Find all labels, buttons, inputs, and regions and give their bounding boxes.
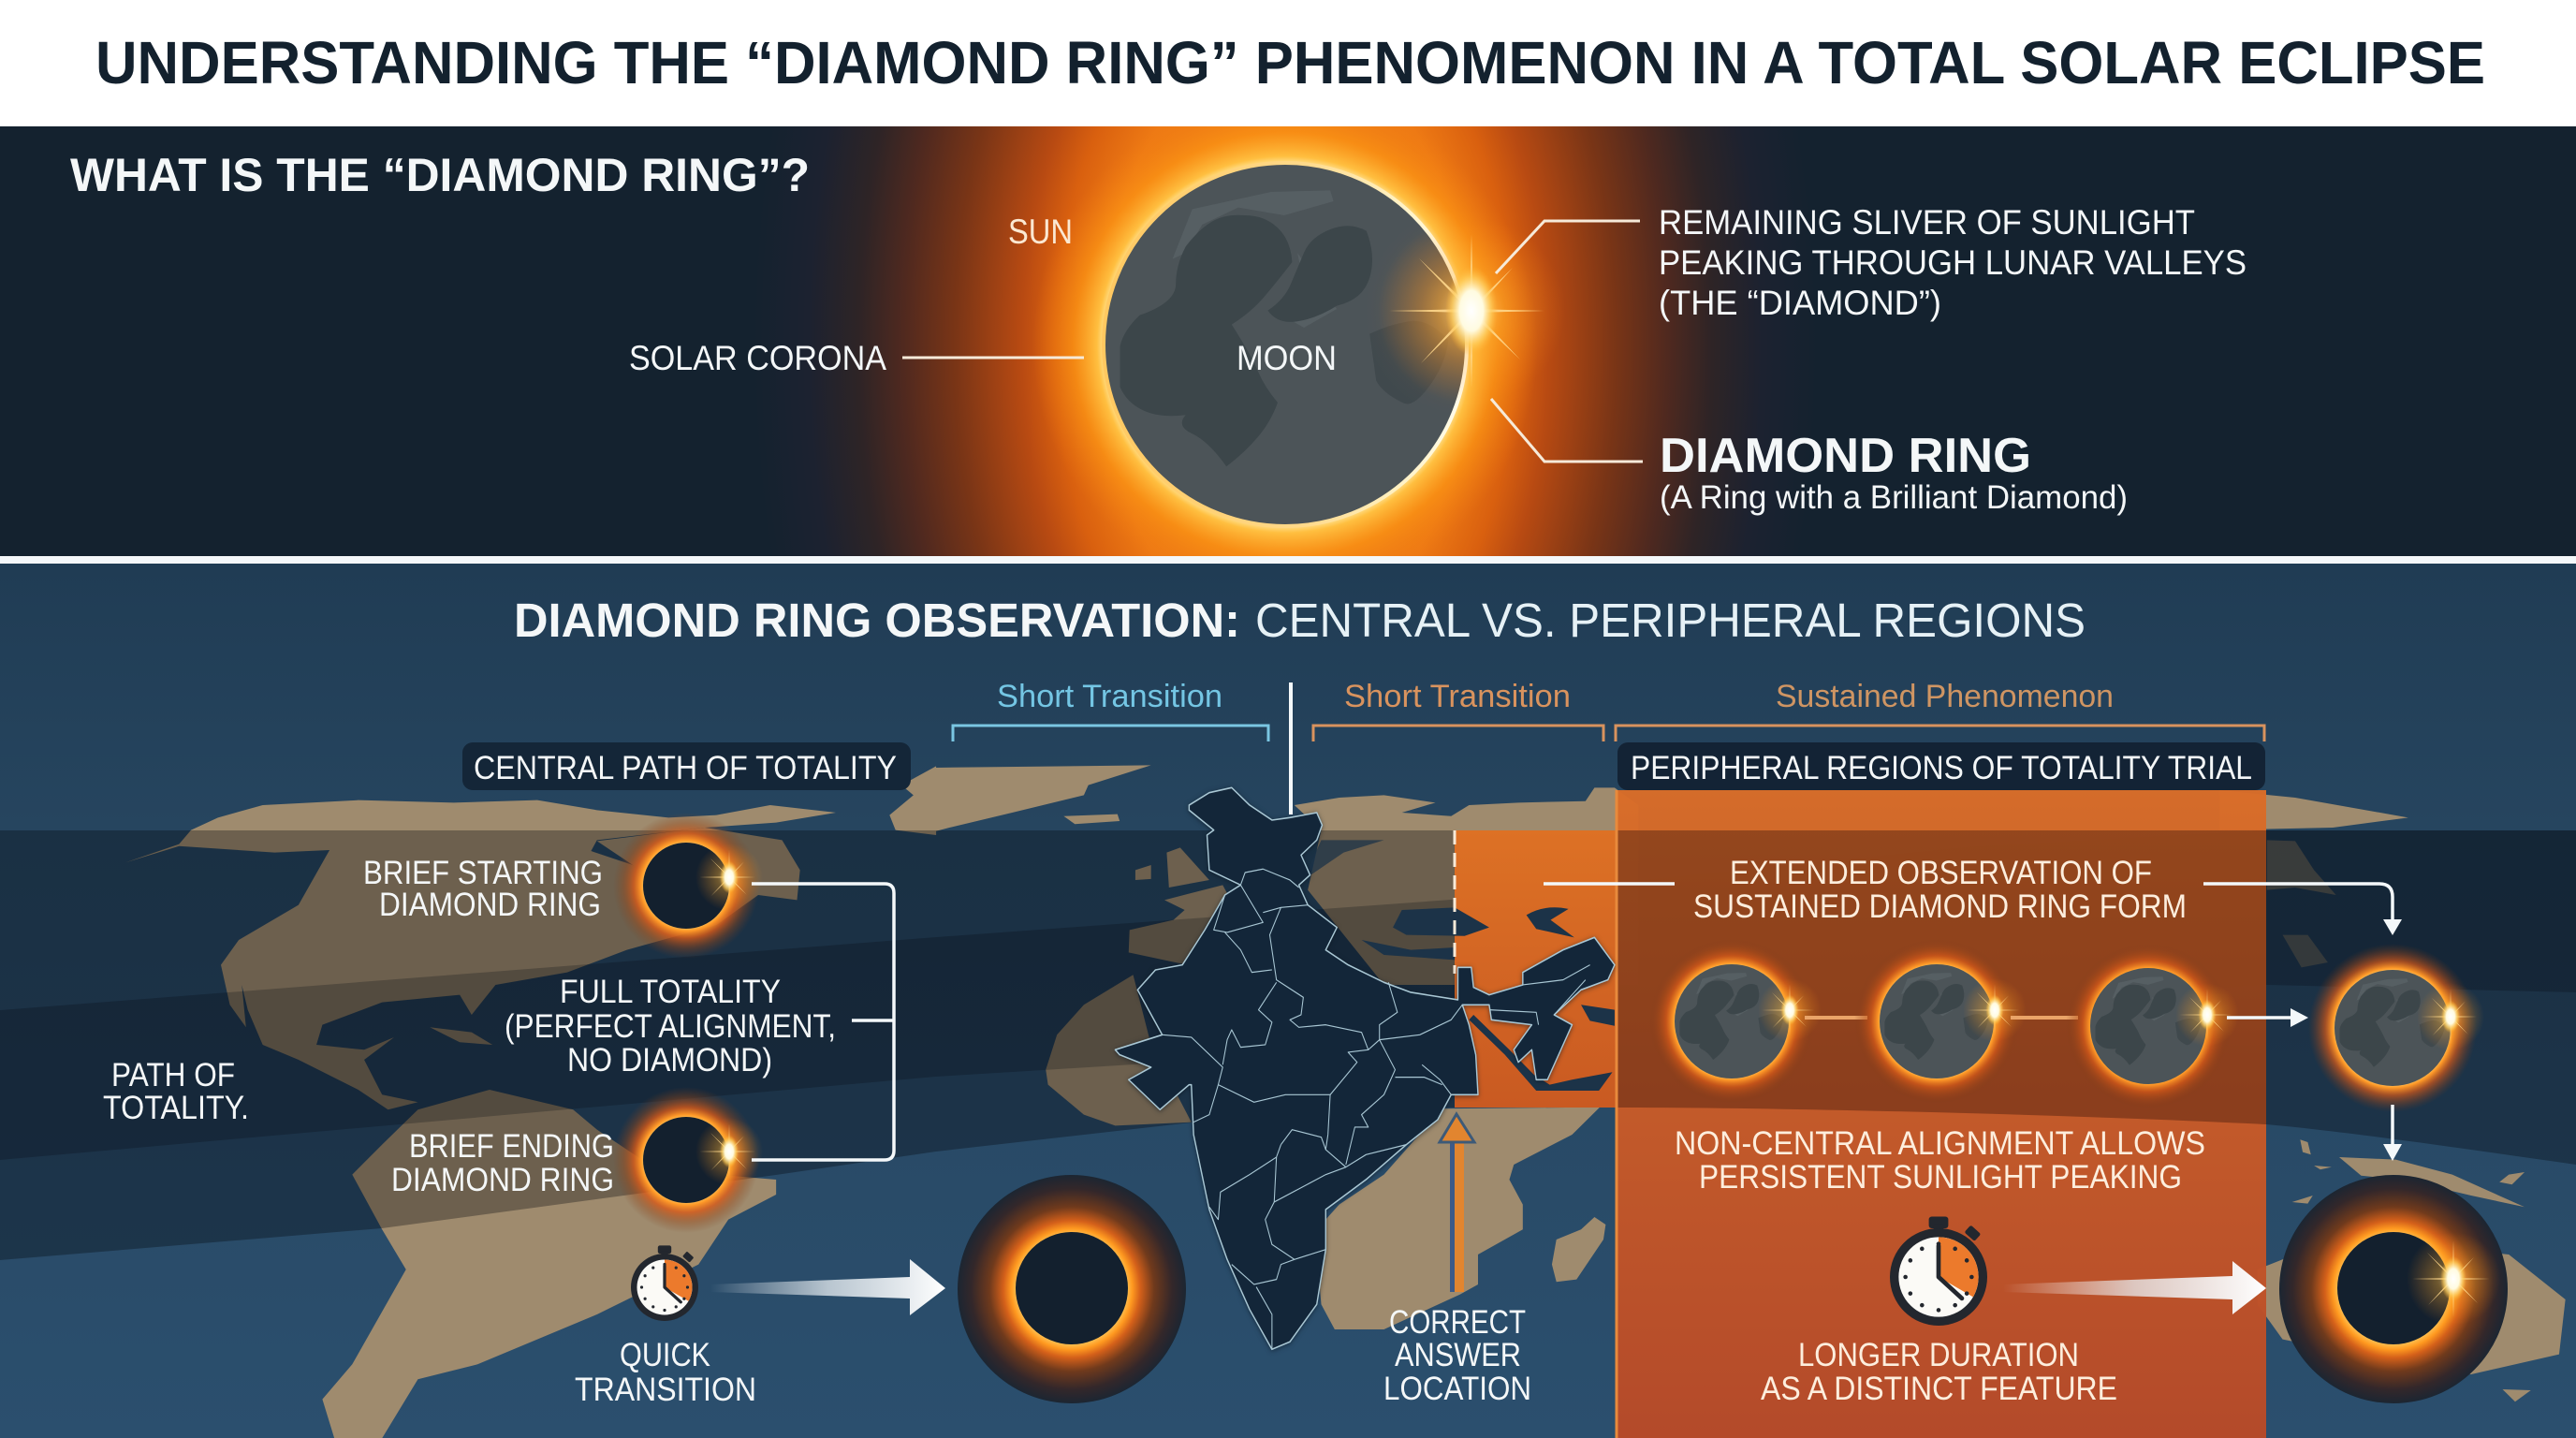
bracket: short transition orange: Short Transition [1344, 679, 1571, 714]
text: extended observation: SUSTAINED DIAMOND RING FORM [1693, 888, 2187, 925]
eclipse: brief ending diamond ring [613, 1087, 763, 1233]
connector 2 [2011, 1016, 2078, 1020]
eclipse 2 [1854, 939, 2027, 1104]
text: extended observation [1693, 855, 2187, 925]
arrow to eclipse 4 [2227, 1008, 2308, 1027]
label: central path of totality: CENTRAL PATH OF TOTALITY [474, 750, 897, 786]
connector lines around extended observation [1544, 884, 2393, 922]
panel: peripheral regions orange column [1617, 790, 2266, 1438]
text: path of totality [103, 1057, 249, 1126]
text: brief ending diamond ring [391, 1128, 614, 1198]
text: non-central alignment: PERSISTENT SUNLIGHT PEAKING [1699, 1159, 2182, 1196]
arrow: quick transition [710, 1259, 945, 1315]
world map landmasses [125, 765, 2566, 1438]
eclipse 3 [2066, 944, 2239, 1108]
bracket: short transition blue [953, 679, 1268, 741]
arrowhead: into fourth eclipse [2383, 919, 2402, 935]
text: correct answer location: CORRECT [1389, 1304, 1526, 1341]
text: longer duration [1761, 1337, 2117, 1407]
label: sun: SUN [1008, 213, 1073, 251]
bracket connector [752, 884, 894, 1160]
text: longer duration: AS A DISTINCT FEATURE [1761, 1371, 2117, 1407]
text: path of totality: TOTALITY. [103, 1090, 249, 1126]
text: correct answer location: LOCATION [1383, 1371, 1531, 1407]
text: quick transition [575, 1337, 756, 1408]
bracket: sustained phenomenon: Sustained Phenomenon [1776, 679, 2114, 714]
bracket: short transition orange [1313, 679, 1603, 741]
callout: diamond ring [1491, 399, 2128, 516]
bracket: sustained phenomenon [1616, 679, 2264, 741]
text: full totality [505, 974, 836, 1078]
text: brief starting diamond ring: BRIEF STARTING [363, 855, 603, 891]
eclipse sequence row [1649, 939, 2484, 1112]
text: correct answer location [1383, 1304, 1531, 1407]
callout: remaining sliver of sunlight: PEAKING THROUGH LUNAR VALLEYS [1659, 243, 2247, 282]
arrow: down to big diamond ring [2383, 1105, 2402, 1161]
panel: observation map [0, 564, 2576, 1438]
divider [0, 556, 2576, 564]
path of totality band [0, 830, 2576, 1260]
center vertical divider [1289, 682, 1293, 814]
eclipse: sustained diamond ring large [2279, 1175, 2508, 1403]
eclipse 1 [1649, 939, 1822, 1104]
text: correct answer location: ANSWER [1395, 1337, 1521, 1373]
text: non-central alignment: NON-CENTRAL ALIGNMENT ALLOWS [1675, 1125, 2205, 1162]
text: quick transition: QUICK [620, 1337, 710, 1373]
eclipse: brief starting diamond ring [613, 813, 763, 959]
heading: observation: DIAMOND RING OBSERVATION: [514, 594, 1240, 647]
solar corona glow [724, 126, 1847, 556]
text: full totality: (PERFECT ALIGNMENT, [505, 1008, 836, 1045]
callout: diamond ring: DIAMOND RING [1660, 429, 2031, 483]
icon: stopwatch long [1890, 1217, 1987, 1326]
callout: remaining sliver of sunlight: REMAINING SLIVER OF SUNLIGHT [1659, 203, 2195, 242]
text: full totality: FULL TOTALITY [560, 974, 781, 1010]
title: UNDERSTANDING THE “DIAMOND RING” PHENOMENON IN A TOTAL SOLAR ECLIPSE [95, 29, 2485, 96]
text: non-central alignment [1675, 1125, 2205, 1196]
section heading: WHAT IS THE “DIAMOND RING”? [70, 149, 810, 201]
text: extended observation: EXTENDED OBSERVATION OF [1730, 855, 2152, 891]
heading: observation [514, 594, 2086, 647]
title band [0, 0, 2576, 126]
India state map [1115, 787, 1615, 1349]
callout: remaining sliver of sunlight: (THE “DIAMOND”) [1659, 284, 1941, 322]
bracket: short transition blue: Short Transition [997, 679, 1222, 714]
heading: observation: CENTRAL VS. PERIPHERAL REGIONS [1255, 594, 2086, 647]
arrow: longer duration [2003, 1261, 2266, 1314]
eclipse 4 [2308, 944, 2484, 1112]
orange region of the map [1303, 830, 1616, 1108]
text: quick transition: TRANSITION [575, 1372, 756, 1408]
text: brief starting diamond ring: DIAMOND RING [379, 887, 601, 923]
callout: remaining sliver of sunlight [1496, 203, 2247, 322]
text: brief starting diamond ring [363, 855, 603, 923]
text: full totality: NO DIAMOND) [567, 1042, 772, 1078]
connector 1 [1805, 1016, 1867, 1020]
moon with diamond flare [1104, 163, 1565, 526]
text: path of totality: PATH OF [111, 1057, 235, 1093]
text: brief ending diamond ring: BRIEF ENDING [409, 1128, 614, 1165]
label: solar corona with leader: SOLAR CORONA [629, 339, 886, 377]
callout: diamond ring: (A Ring with a Brilliant Diamond) [1660, 479, 2128, 516]
label: peripheral regions of totality trial: PERIPHERAL REGIONS OF TOTALITY TRIAL [1631, 750, 2252, 786]
icon: stopwatch quick [631, 1245, 698, 1321]
arrow: correct answer location [1440, 1114, 1474, 1292]
text: longer duration: LONGER DURATION [1798, 1337, 2079, 1373]
text: brief ending diamond ring: DIAMOND RING [391, 1162, 614, 1198]
central darker totality band [0, 830, 2576, 1160]
label: moon: MOON [1237, 339, 1337, 377]
panel: what is the diamond ring [0, 126, 2576, 556]
eclipse: total eclipse large [958, 1175, 1186, 1403]
